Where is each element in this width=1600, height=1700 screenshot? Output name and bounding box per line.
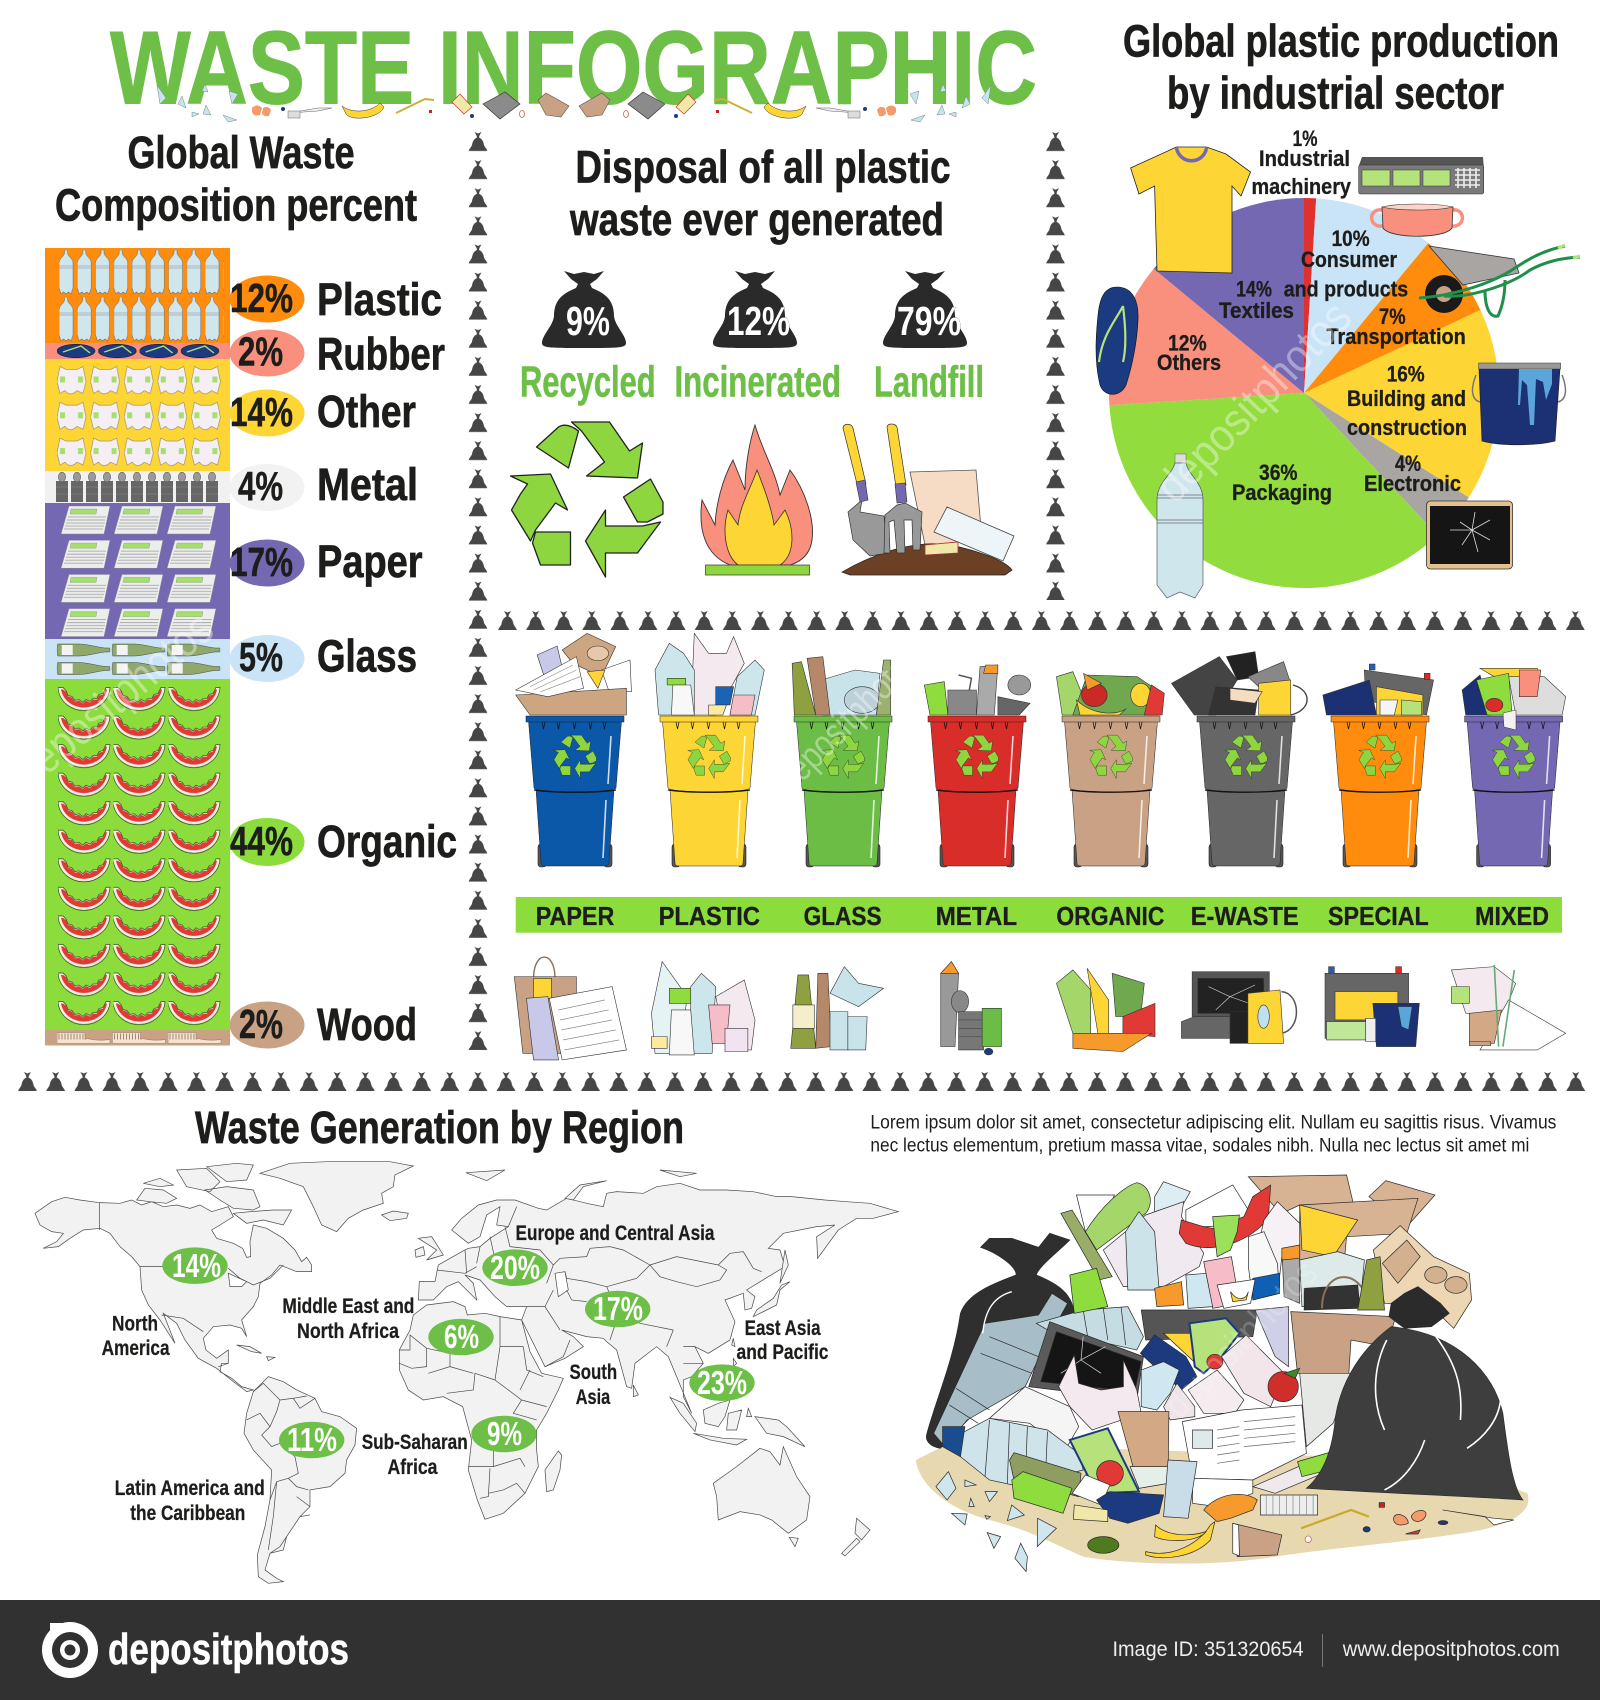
items: e-waste (1181, 972, 1296, 1043)
region labels: Latin America and (115, 1477, 265, 1500)
recycled column: Recycled (520, 357, 656, 406)
metal contents (924, 665, 1031, 715)
incinerated column: Incinerated (674, 357, 841, 406)
special contents (1323, 664, 1434, 715)
region values: 11% (287, 1421, 337, 1458)
incinerated column: 12% (727, 298, 790, 344)
heading: disposal: Disposal of all plastic (576, 142, 950, 193)
region values: 9% (487, 1415, 522, 1452)
panel: lorem text and garbage pile (870, 1112, 1557, 1572)
bin: organic (1062, 716, 1160, 867)
region labels: and Pacific (736, 1341, 829, 1364)
image id: Image ID: 351320654 (1112, 1637, 1304, 1661)
region labels: Sub-Saharan (362, 1431, 468, 1454)
watermarks: depositphotos (4, 602, 223, 798)
plastic contents (655, 633, 764, 715)
recycled column: 9% (566, 298, 610, 344)
icon: paint bucket (1473, 363, 1565, 445)
logo wordmark: depositphotos (108, 1625, 349, 1674)
pie labels: and products (1284, 276, 1408, 302)
bin label strip: ORGANIC (1056, 901, 1165, 931)
e-waste contents (1171, 652, 1307, 715)
panel: disposal of plastic waste (510, 142, 1014, 577)
panel: global waste composition (45, 127, 457, 1050)
pie labels: 12% (1168, 331, 1207, 356)
region values: 6% (444, 1318, 479, 1355)
icon: t-shirt (1131, 147, 1250, 273)
heading: composition: Global Waste (128, 127, 354, 178)
region values: 14% (172, 1247, 221, 1284)
heading: composition (55, 127, 417, 230)
category labels: Wood (317, 999, 417, 1050)
heading: disposal (569, 142, 950, 245)
icon: flip-flop (1096, 287, 1138, 394)
stacked pictogram bar (45, 248, 230, 1046)
heading: plastic production: by industrial sector (1167, 68, 1504, 119)
percent values: 2% (239, 1001, 283, 1047)
region labels: East Asia (745, 1317, 821, 1340)
panel: sorted waste bins (514, 633, 1566, 1060)
bin label strip: METAL (936, 901, 1017, 931)
bin: metal (928, 716, 1026, 867)
world map (35, 1162, 898, 1583)
region labels: South (570, 1361, 617, 1384)
bin: special (1331, 716, 1429, 867)
category labels: Rubber (317, 328, 445, 380)
bin: e-waste (1197, 716, 1295, 867)
items: paper (514, 957, 626, 1060)
pie labels: Textiles (1219, 298, 1294, 323)
bin label strip: SPECIAL (1328, 901, 1429, 931)
pie labels: 16% (1387, 361, 1425, 386)
pie labels: 7% (1379, 304, 1406, 329)
items: metal (941, 962, 1001, 1055)
watermarks: depositphotos (1156, 1252, 1326, 1426)
pie labels: Packaging (1232, 480, 1332, 505)
paper contents (516, 633, 631, 715)
bin label strip: PAPER (536, 901, 614, 931)
bin label strip: MIXED (1475, 901, 1549, 931)
mixed contents (1462, 668, 1566, 715)
region values: 20% (490, 1249, 540, 1286)
percent values: 12% (230, 275, 293, 321)
percent ellipses (230, 276, 304, 1048)
pie labels: Industrial (1259, 146, 1350, 171)
overflow from white mixed bin cloth (1503, 710, 1516, 730)
region labels: North Africa (297, 1320, 399, 1343)
icon: plastic bottle (1157, 454, 1203, 598)
pie labels: 14% (1236, 276, 1272, 302)
watermarks: depositphotos (1146, 291, 1362, 512)
bin: glass (794, 716, 892, 867)
region labels: Africa (388, 1456, 438, 1479)
items: plastic (651, 962, 755, 1055)
percent values: 2% (238, 328, 283, 374)
glass contents (792, 657, 891, 715)
heading: region: Waste Generation by Region (195, 1102, 684, 1153)
bin label strip (516, 897, 1562, 933)
category labels (317, 274, 457, 1050)
pie labels: Electronic (1364, 471, 1461, 496)
body text: nec lectus elementum, pretium massa vitae, sodales nibh. Nulla nec lectus sit amet mi (870, 1135, 1529, 1157)
waste item illustrations (514, 957, 1566, 1060)
region values: 23% (697, 1364, 747, 1401)
pie labels: 10% (1332, 226, 1370, 251)
watermarks (4, 291, 1362, 1426)
dividers (468, 132, 488, 1050)
pie labels (1157, 126, 1467, 505)
title: WASTE INFOGRAPHIC (110, 10, 1037, 126)
pie labels: machinery (1252, 174, 1352, 199)
bin label strip: PLASTIC (659, 901, 760, 931)
percent values: 5% (239, 634, 283, 680)
region labels (102, 1222, 829, 1525)
category labels: Metal (317, 459, 418, 510)
pie labels: Transportation (1326, 324, 1466, 349)
heading: disposal: waste ever generated (569, 194, 944, 245)
items: mixed (1451, 965, 1566, 1050)
category labels: Other (317, 386, 416, 437)
bin contents (516, 633, 1566, 715)
heading: plastic production (1123, 16, 1559, 119)
icon: broken tablet (1426, 501, 1512, 569)
panel: global plastic production pie (1096, 16, 1580, 598)
bin label strip: E-WASTE (1191, 901, 1299, 931)
bin: mixed (1465, 716, 1563, 867)
landfill column (842, 271, 1014, 575)
pie labels: Others (1157, 350, 1221, 375)
pie labels: 4% (1395, 451, 1421, 476)
landfill column: Landfill (874, 357, 984, 406)
items: organic (1056, 968, 1155, 1052)
percent values: 44% (230, 818, 293, 864)
footer bar (0, 1600, 1600, 1700)
region values: 17% (593, 1290, 643, 1327)
category labels: Plastic (317, 274, 442, 325)
pie labels: 36% (1259, 460, 1298, 485)
region labels: Middle East and (282, 1295, 414, 1318)
category labels: Glass (317, 631, 417, 682)
bin label strip: GLASS (804, 901, 882, 931)
organic contents (1056, 672, 1164, 715)
icon: kitchen scale (1359, 157, 1484, 194)
items: glass (791, 967, 884, 1050)
body text (870, 1112, 1557, 1157)
percent values: 4% (238, 463, 283, 509)
region labels: Asia (576, 1386, 610, 1409)
percent values: 17% (230, 539, 293, 585)
bin: paper (526, 716, 624, 867)
icon: bowl (1372, 204, 1462, 236)
icon: wheelbarrow (1419, 245, 1580, 316)
pie chart (1109, 198, 1499, 588)
incinerated column (674, 271, 841, 575)
bin: plastic (660, 716, 758, 867)
percent values: 14% (230, 389, 293, 435)
watermarks: depositphotos (767, 638, 930, 801)
percent values (230, 275, 293, 1047)
items: special (1325, 967, 1419, 1047)
region labels: America (102, 1337, 170, 1360)
pie labels: Consumer (1301, 247, 1397, 272)
region values (162, 1247, 755, 1458)
garbage pile illustration (916, 1175, 1528, 1572)
heading: composition: Composition percent (55, 180, 417, 230)
website: www.depositphotos.com (1342, 1637, 1560, 1661)
pie labels: 1% (1292, 126, 1318, 151)
region labels: Europe and Central Asia (516, 1222, 715, 1245)
category labels: Organic (317, 816, 457, 867)
region labels: the Caribbean (130, 1502, 245, 1525)
pie labels: Building and (1347, 386, 1466, 411)
recycled column (510, 271, 663, 577)
category labels: Paper (317, 536, 423, 587)
panel: waste generation by region (35, 1102, 898, 1583)
landfill column: 79% (897, 298, 961, 344)
pie labels: construction (1347, 415, 1467, 440)
region labels: North (112, 1313, 158, 1336)
logo mark (42, 1622, 98, 1678)
